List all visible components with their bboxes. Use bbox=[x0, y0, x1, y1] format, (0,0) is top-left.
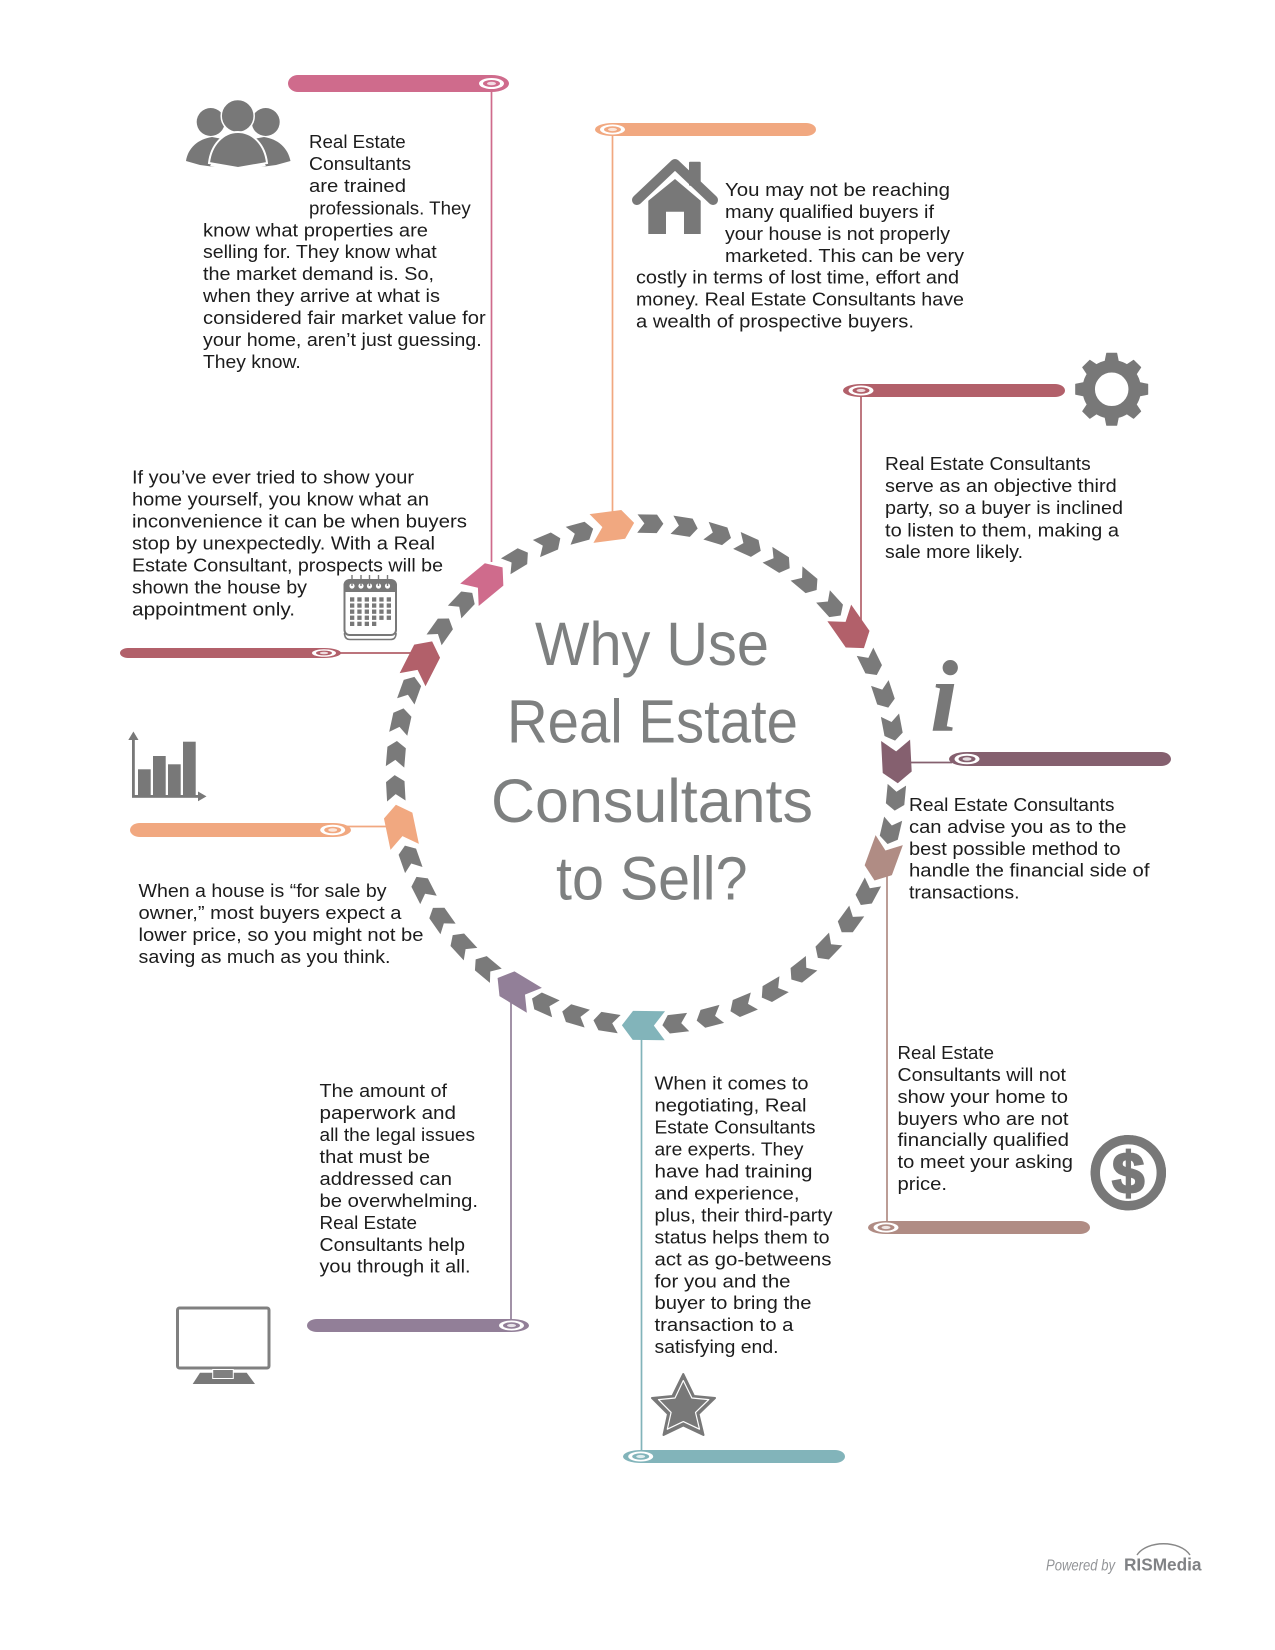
text block: trained professionals: are trained bbox=[309, 175, 406, 196]
text block: sale price: owner,” most buyers expect a bbox=[138, 902, 402, 923]
title bbox=[491, 610, 813, 912]
text block: appointments: home yourself, you know what an bbox=[132, 488, 429, 510]
text block: paperwork: paperwork and bbox=[320, 1102, 456, 1123]
text block: objective third party: to listen to them, making a bbox=[885, 520, 1120, 540]
text block: paperwork: you through it all. bbox=[320, 1256, 470, 1277]
ring of coloured marker arrows bbox=[382, 508, 912, 1040]
text block: objective third party: party, so a buyer is inclined bbox=[885, 497, 1123, 518]
panel: paperwork connector bar bbox=[307, 1000, 529, 1332]
text block: financial advice: handle the financial side of bbox=[909, 860, 1150, 880]
text block: trained professionals: your home, aren’t just guessing. bbox=[203, 329, 482, 350]
footer logo: Powered by RISMedia bbox=[1046, 1544, 1202, 1574]
text block: trained professionals: selling for. They know what bbox=[203, 241, 437, 262]
icon: information i: i bbox=[930, 640, 958, 754]
text block: negotiating: have had training bbox=[654, 1160, 812, 1182]
text block: trained professionals: know what properties are bbox=[203, 220, 428, 240]
title: Consultants bbox=[491, 767, 813, 835]
panel: qualified buyers connector bar bbox=[868, 870, 1090, 1234]
text block: negotiating: are experts. They bbox=[654, 1138, 804, 1160]
text block: qualified buyers: show your home to bbox=[898, 1086, 1068, 1107]
text block: objective third party: Real Estate Consultants bbox=[885, 453, 1091, 474]
text block: paperwork: The amount of bbox=[320, 1080, 448, 1101]
text block: trained professionals: considered fair market value for bbox=[203, 307, 486, 328]
text block: appointments: appointment only. bbox=[132, 598, 295, 620]
panel: trained professionals connector bar bbox=[288, 75, 509, 562]
title: to Sell? bbox=[556, 844, 748, 912]
text block: paperwork: Consultants help bbox=[320, 1234, 465, 1255]
text block: trained professionals: the market demand is. So, bbox=[203, 263, 434, 284]
text block: negotiating: and experience, bbox=[654, 1182, 800, 1204]
panel: financial advice connector bar bbox=[905, 752, 1171, 766]
text block: marketing: a wealth of prospective buyers. bbox=[636, 310, 914, 332]
text block: qualified buyers: buyers who are not bbox=[898, 1108, 1068, 1129]
text block: marketing: marketed. This can be very bbox=[725, 245, 965, 266]
icon: dollar badge: $ bbox=[1112, 1141, 1144, 1206]
text block: trained professionals bbox=[202, 131, 486, 372]
text block: paperwork: Real Estate bbox=[320, 1212, 417, 1233]
text block: paperwork bbox=[320, 1080, 478, 1277]
panel: marketing connector bar bbox=[595, 123, 816, 516]
text block: negotiating: buyer to bring the bbox=[654, 1292, 812, 1313]
text block: negotiating: act as go-betweens bbox=[654, 1248, 832, 1270]
text block: objective third party: sale more likely. bbox=[885, 541, 1023, 562]
text block: objective third party bbox=[885, 453, 1123, 562]
text block: appointments: inconvenience it can be when buyers bbox=[132, 510, 467, 532]
text block: negotiating: satisfying end. bbox=[654, 1336, 778, 1357]
text block: appointments: shown the house by bbox=[132, 576, 308, 598]
title: Real Estate bbox=[507, 688, 798, 756]
text block: negotiating bbox=[654, 1072, 833, 1357]
title: Why Use bbox=[535, 610, 769, 678]
panel: negotiating connector bar bbox=[623, 1028, 845, 1463]
icon: star bbox=[652, 1374, 715, 1435]
text block: paperwork: all the legal issues bbox=[320, 1124, 475, 1145]
panel: appointments connector bar bbox=[120, 648, 416, 658]
text block: sale price bbox=[138, 880, 424, 967]
text block: sale price: lower price, so you might not be bbox=[138, 924, 424, 945]
icon: house bbox=[637, 162, 713, 234]
panel: objective third party connector bar bbox=[843, 384, 1065, 625]
text block: qualified buyers: financially qualified bbox=[898, 1129, 1069, 1150]
text block: marketing: many qualified buyers if bbox=[725, 201, 935, 222]
text block: objective third party: serve as an objective third bbox=[885, 475, 1117, 496]
text block: marketing: You may not be reaching bbox=[725, 179, 950, 200]
text block: sale price: When a house is “for sale by bbox=[138, 880, 387, 901]
text block: appointments: Estate Consultant, prospects will be bbox=[132, 554, 443, 576]
text block: trained professionals: professionals. They bbox=[309, 198, 471, 218]
icon: people bbox=[186, 100, 290, 168]
footer logo: Powered by RISMedia: RISMedia bbox=[1124, 1554, 1202, 1574]
text block: trained professionals: when they arrive at what is bbox=[202, 285, 440, 306]
text block: financial advice bbox=[909, 794, 1150, 902]
text block: financial advice: Real Estate Consultants bbox=[909, 794, 1114, 815]
text block: negotiating: plus, their third-party bbox=[654, 1204, 833, 1226]
text block: financial advice: best possible method to bbox=[909, 838, 1120, 859]
text block: paperwork: that must be bbox=[320, 1146, 430, 1167]
text block: marketing bbox=[636, 179, 965, 332]
footer logo: Powered by RISMedia: Powered by bbox=[1046, 1558, 1116, 1574]
text block: trained professionals: They know. bbox=[203, 351, 301, 372]
text block: marketing: costly in terms of lost time, effort and bbox=[636, 266, 959, 288]
text block: financial advice: transactions. bbox=[909, 882, 1020, 902]
text block: negotiating: negotiating, Real bbox=[654, 1094, 806, 1116]
text block: negotiating: status helps them to bbox=[654, 1226, 830, 1248]
icon: gear bbox=[1076, 353, 1148, 425]
text block: appointments: stop by unexpectedly. With a Real bbox=[132, 532, 435, 554]
text block: trained professionals: Consultants bbox=[309, 153, 411, 174]
text block: paperwork: addressed can bbox=[320, 1168, 452, 1189]
text block: paperwork: be overwhelming. bbox=[320, 1190, 478, 1211]
text block: marketing: money. Real Estate Consultants have bbox=[636, 288, 964, 310]
icon: calendar bbox=[344, 575, 396, 640]
text block: qualified buyers: price. bbox=[898, 1173, 947, 1194]
text block: qualified buyers: Consultants will not bbox=[898, 1064, 1066, 1085]
text block: qualified buyers bbox=[898, 1042, 1073, 1194]
text block: negotiating: When it comes to bbox=[654, 1072, 808, 1094]
icon: dollar badge bbox=[1092, 1136, 1165, 1209]
icon: bar chart bbox=[128, 732, 206, 801]
text block: appointments bbox=[132, 466, 467, 620]
text block: negotiating: for you and the bbox=[654, 1270, 790, 1292]
text block: trained professionals: Real Estate bbox=[309, 131, 406, 152]
text block: qualified buyers: Real Estate bbox=[898, 1042, 994, 1063]
icon: monitor bbox=[178, 1308, 269, 1384]
text block: qualified buyers: to meet your asking bbox=[898, 1151, 1073, 1172]
text block: financial advice: can advise you as to the bbox=[909, 816, 1126, 837]
text block: negotiating: Estate Consultants bbox=[654, 1116, 816, 1138]
ring of gray chevron arrows bbox=[386, 514, 906, 1034]
text block: marketing: your house is not properly bbox=[725, 223, 951, 244]
text block: negotiating: transaction to a bbox=[654, 1314, 794, 1335]
text block: appointments: If you’ve ever tried to show your bbox=[132, 466, 414, 488]
text block: sale price: saving as much as you think. bbox=[138, 946, 390, 967]
panel: sale price connector bar bbox=[130, 823, 392, 837]
